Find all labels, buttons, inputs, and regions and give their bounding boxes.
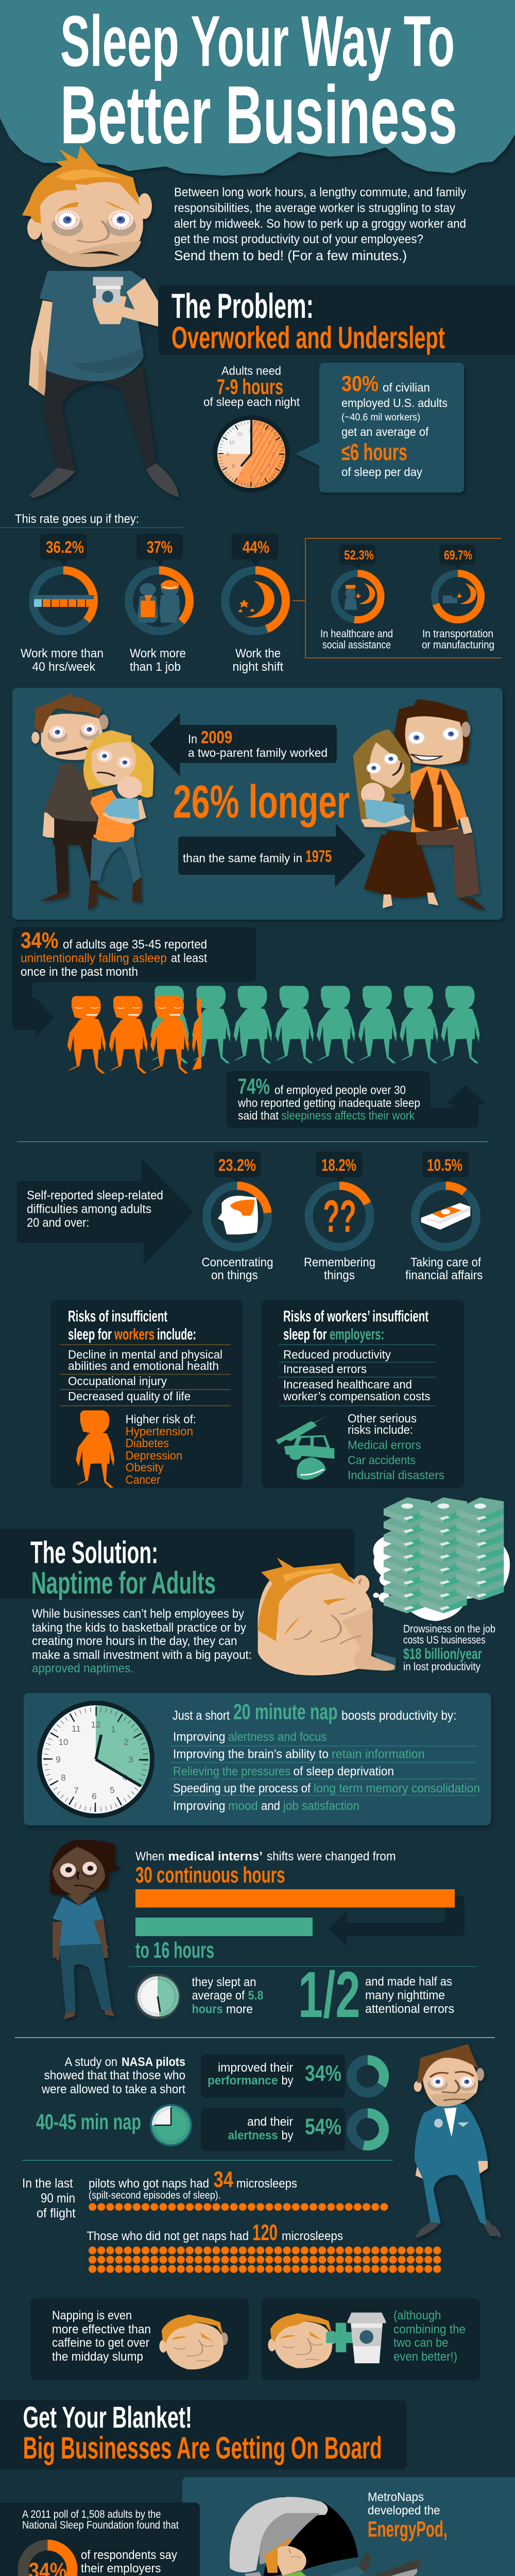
stat: performance 34%: improved their	[218, 2061, 293, 2075]
stat: slept 5.8 hours more: hours	[192, 2002, 222, 2016]
panel: combining nap and coffee: (although	[393, 2309, 441, 2323]
stat: medical interns shifts chart: medical interns’	[168, 1850, 263, 1863]
stat: drowsiness cost: costs US businesses	[403, 1634, 486, 1646]
stat: 10.5% financial affairs: financial affairs	[405, 1268, 483, 1282]
icon: clock showing 7-9 hours: 1	[260, 432, 263, 437]
panel: 20 minute nap	[24, 1693, 491, 1825]
panel: families work longer	[12, 688, 503, 920]
list: other serious risks: Car accidents	[348, 1453, 416, 1467]
stat: 18.2% remembering: 18.2%	[321, 1156, 356, 1175]
icon: head with brain	[218, 1196, 258, 1234]
stat: microsleeps without naps: Those who did not get naps had	[87, 2229, 249, 2243]
stat: 18.2% remembering	[304, 1151, 375, 1282]
callout: 30% of workers: 30%	[341, 371, 379, 396]
stat: 44% work night shift: 44%	[243, 538, 269, 556]
icon: orange person	[76, 1410, 114, 1488]
stat: alertness 54%: alertness	[228, 2129, 278, 2142]
icon: big clock: 9	[56, 1755, 61, 1765]
arrow: than the same family in 1975: 1975	[305, 847, 332, 866]
stat: microsleeps without naps: 120	[252, 2220, 278, 2245]
section heading: the solution: Naptime for Adults	[31, 1566, 216, 1600]
arrow: in 2009: In	[188, 733, 197, 746]
stat: 23.2% concentrating: 23.2%	[218, 1156, 256, 1175]
panel: sleep foundation poll	[0, 2503, 200, 2576]
list: other serious risks: Medical errors	[348, 1438, 421, 1452]
stat: 26% longer: 26% longer	[173, 776, 350, 828]
stat: microsleeps with naps	[22, 2167, 388, 2221]
panel: risks for workers: sleep for	[68, 1325, 112, 1343]
icon: clock showing 7-9 hours: 10	[229, 440, 235, 446]
icon: clock showing 7-9 hours: 7	[240, 472, 243, 478]
icon: 45 minute clock	[150, 2104, 192, 2146]
stat: microsleeps with naps: of flight	[37, 2206, 76, 2221]
icon: syringe, truck and helmet	[276, 1416, 334, 1480]
stat: 18.2% remembering: Remembering	[304, 1256, 375, 1269]
stat: alertness 54%: 54%	[305, 2114, 341, 2139]
list: nap benefits: Speeding up the process of	[173, 1782, 311, 1795]
list: nap benefits: retain information	[332, 1748, 425, 1761]
icon: big clock: 10	[59, 1737, 68, 1747]
stat: microsleeps without naps	[87, 2220, 441, 2274]
list: nap benefits: mood	[228, 1799, 258, 1813]
list: nap benefits: Improving	[173, 1730, 226, 1744]
bar: 16 hours	[135, 1918, 313, 1936]
stat: performance 34%: 34%	[305, 2061, 341, 2086]
callout: 30% of workers: (~40.6 mil workers)	[341, 412, 420, 423]
character: sleeping head	[258, 1557, 396, 1675]
list: health risks: Depression	[126, 1449, 182, 1462]
list: nap benefits: and	[261, 1799, 280, 1813]
stat: performance 34%: performance	[208, 2074, 278, 2088]
character: tired worker with coffee	[22, 145, 179, 498]
list: health risks: Higher risk of:	[126, 1413, 196, 1426]
pictogram: 120 dots	[88, 2246, 441, 2274]
arrow: than the same family in 1975: than the same family in	[183, 852, 302, 865]
solution intro text: approved naptimes.	[32, 1662, 134, 1675]
panel: napping vs caffeine	[30, 2298, 249, 2380]
panel: risks for workers: Decline in mental and physical	[68, 1348, 222, 1361]
panel: 74% affected at work: 74%	[238, 1074, 270, 1099]
arrow: from long shift to short shift	[329, 1895, 465, 1945]
intro text: responsibilities, the average worker is struggling to stay	[174, 201, 455, 215]
panel: risks for employers	[262, 1300, 464, 1488]
list: health risks: Cancer	[126, 1473, 160, 1486]
section heading: get your blanket	[0, 2400, 407, 2469]
stat: 37% work more than one job	[129, 534, 190, 674]
panel: combining nap and coffee: combining the	[393, 2323, 466, 2336]
panel: risks for employers: worker’s compensation costs	[283, 1389, 431, 1403]
icon: big clock: 1	[111, 1724, 116, 1734]
stat: medical interns shifts chart: When	[135, 1850, 164, 1863]
stat: 10.5% financial affairs	[405, 1151, 483, 1282]
stat: adults need 7-9 hours: 7-9 hours	[217, 375, 283, 399]
icon: clock showing 7-9 hours: 11	[237, 432, 243, 437]
list: health risks: Hypertension	[126, 1425, 193, 1438]
stat: half as many errors: attentional errors	[365, 2002, 454, 2016]
stat: half as many errors: and made half as	[365, 1975, 452, 1989]
icon: big clock: 5	[110, 1785, 115, 1795]
list: nap benefits: Relieving the pressures	[173, 1765, 290, 1778]
text: NASA pilot study: NASA pilots	[122, 2055, 185, 2069]
stat: microsleeps with naps: microsleeps	[236, 2177, 297, 2191]
panel: napping vs caffeine: the midday slump	[52, 2350, 143, 2364]
character: tired 2009 family	[31, 693, 154, 910]
list: other serious risks	[348, 1412, 444, 1482]
stat: half as many errors: 1/2	[298, 1958, 360, 2031]
stat: slept 5.8 hours more: average of	[192, 1989, 245, 2003]
text: NASA pilot study: 40-45 min nap	[36, 2110, 141, 2134]
list: health risks: Diabetes	[126, 1436, 169, 1450]
text: NASA pilot study: showed that that those who	[44, 2069, 185, 2082]
icon: big clock: 4	[123, 1773, 128, 1783]
intro text: Between long work hours, a lengthy commute, and family	[174, 185, 466, 199]
stat: microsleeps without naps: microsleeps	[282, 2229, 343, 2243]
panel: 34% unintentionally falling asleep: 34%	[21, 928, 59, 953]
panel: 74% affected at work: said that	[238, 1109, 279, 1122]
panel: risks for employers: sleep for	[283, 1325, 327, 1343]
stat: 52.3% healthcare: In healthcare and	[320, 628, 393, 640]
icon: big clock	[37, 1701, 154, 1818]
panel: risks for workers: Occupational injury	[68, 1375, 167, 1388]
icon: clock showing 7-9 hours: 6	[250, 476, 253, 481]
list: nap benefits	[170, 1730, 480, 1813]
stat: slept 5.8 hours more: they slept an	[192, 1975, 256, 1989]
stat: 52.3% healthcare	[320, 545, 393, 651]
character: medical intern	[50, 1840, 121, 2019]
stat: slept 5.8 hours more	[135, 1974, 264, 2019]
list: nap benefits: long term memory consolidation	[314, 1782, 480, 1795]
pictogram: row of orange sleepy adults	[67, 996, 201, 1074]
panel: 74% affected at work: who reported getting inadequate sleep	[237, 1096, 420, 1110]
panel: 34% unintentionally falling asleep: unintentionally falling asleep	[21, 951, 167, 965]
stat: half as many errors	[298, 1958, 454, 2031]
pictogram: 34 dots	[88, 2203, 388, 2211]
icon: big clock: 11	[72, 1724, 81, 1734]
intro text: get the most productivity out of your employees?	[174, 232, 423, 246]
stat: microsleeps with naps: pilots who got naps had	[89, 2177, 209, 2191]
stat: 37% work more than one job: 37%	[147, 538, 173, 556]
stat: 69.7% transportation: 69.7%	[444, 548, 472, 563]
stat: 10.5% financial affairs: 10.5%	[427, 1156, 462, 1175]
panel: 74% affected at work: of employed people over 30	[274, 1083, 406, 1096]
section heading: the solution	[0, 1529, 354, 1600]
panel: 34% unintentionally falling asleep	[12, 927, 256, 1037]
icon: big clock: 3	[128, 1755, 133, 1765]
section heading: get your blanket: Get Your Blanket!	[23, 2401, 192, 2434]
icon: clock showing 7-9 hours: 2	[268, 440, 271, 446]
tired worker body	[29, 271, 179, 498]
arrow: than the same family in 1975	[178, 823, 366, 887]
arrow: in 2009: 2009	[201, 727, 232, 747]
bar: 30 hours	[135, 1889, 455, 1907]
title	[60, 1, 457, 161]
section heading: the solution: The Solution:	[30, 1535, 158, 1570]
stat: 52.3% healthcare: social assistance	[322, 639, 391, 651]
section heading: the problem: The Problem:	[171, 286, 314, 326]
panel: napping vs caffeine: Napping is even	[52, 2309, 132, 2323]
stat: slept 5.8 hours more: more	[226, 2002, 253, 2016]
text: metronaps developed	[368, 2490, 448, 2542]
panel: risks for employers: Risks of workers’ insufficient	[283, 1307, 428, 1325]
stat: microsleeps with naps: In the last	[22, 2176, 73, 2191]
icon: clock showing 7-9 hours: 4	[268, 464, 271, 469]
stat: 69.7% transportation	[422, 545, 494, 651]
stat: performance 34%	[201, 2055, 384, 2098]
solution intro text: taking the kids to basketball practice or by	[32, 1621, 246, 1635]
callout: 30% of workers: ≤6 hours	[341, 439, 407, 465]
icon: clock showing 7-9 hours: 8	[232, 464, 235, 469]
panel: combining nap and coffee: two can be	[393, 2336, 448, 2350]
panel: risks for employers: employers:	[330, 1325, 384, 1343]
character: rested 1975 family	[353, 699, 486, 910]
stat: microsleeps with naps: (spilt-second episodes of sleep).	[89, 2190, 221, 2201]
icon: moon and stars	[238, 581, 274, 618]
stat: 69.7% transportation: In transportation	[422, 628, 493, 640]
stat: alertness 54%	[201, 2108, 384, 2151]
icon: clock showing 7-9 hours	[213, 415, 290, 493]
panel: risks for workers	[51, 1300, 243, 1488]
panel: combining nap and coffee: even better!)	[393, 2350, 457, 2364]
stat: 36.2% work more than 40 hrs: 36.2%	[46, 538, 84, 556]
arrow panel: self-reported difficulties: 20 and over:	[27, 1216, 90, 1230]
stat: drowsiness cost	[403, 1623, 495, 1673]
panel: risks for workers: Risks of insufficient	[68, 1307, 167, 1325]
stat: 34% allowed to nap: of respondents say	[81, 2548, 177, 2562]
stat: 23.2% concentrating: on things	[211, 1268, 258, 1282]
text: metronaps developed: developed the	[368, 2504, 440, 2518]
panel: 74% affected at work	[227, 1071, 486, 1128]
icon: clock showing 7-9 hours: 5	[260, 472, 263, 478]
list: health risks	[126, 1413, 196, 1486]
icon: big clock: 7	[74, 1786, 79, 1795]
stat: 23.2% concentrating	[202, 1151, 273, 1282]
icon: clock showing 7-9 hours: 3	[271, 452, 274, 457]
icon: big clock: 12	[91, 1720, 100, 1730]
icon: big clock: 2	[124, 1737, 129, 1747]
panel: risks for workers: workers	[114, 1325, 154, 1343]
stat: 44% work night shift: Work the	[235, 647, 281, 660]
stat: medical interns shifts chart: 30 continuous hours	[135, 1862, 285, 1888]
arrow panel: self-reported difficulties	[17, 1159, 194, 1265]
arrow: in 2009: a two-parent family worked	[188, 746, 328, 759]
list: nap benefits: alertness and focus	[228, 1730, 327, 1744]
panel: risks for employers: Increased healthcare and	[283, 1378, 412, 1391]
arrow: in 2009	[149, 713, 337, 776]
stat: alertness 54%: and their	[247, 2115, 293, 2129]
panel: sleep foundation poll: A 2011 poll of 1,508 adults by the	[22, 2509, 161, 2520]
stat: adults need 7-9 hours	[203, 364, 300, 409]
stat: adults need 7-9 hours: of sleep each night	[203, 395, 300, 409]
heading: this rate goes up: This rate goes up if they:	[15, 512, 139, 526]
stat: 44% work night shift	[225, 534, 286, 674]
stat: microsleeps with naps: 90 min	[41, 2191, 75, 2206]
icon: two workers	[138, 580, 180, 623]
panel: 74% affected at work: sleepiness affects their work	[281, 1109, 415, 1122]
stat: 69.7% transportation: or manufacturing	[422, 639, 494, 651]
panel: 34% unintentionally falling asleep: at least	[171, 951, 207, 965]
callout: 30% of workers: of civilian	[383, 381, 430, 394]
panel: napping vs caffeine: more effective than	[52, 2323, 151, 2336]
intro text	[174, 185, 466, 263]
intro text: Send them to bed! (For a few minutes.)	[174, 248, 407, 263]
icon: stack of money	[421, 1203, 470, 1230]
solution intro text	[32, 1607, 252, 1675]
frame: night shift sectors	[293, 538, 502, 658]
icon: sleepy head	[159, 2314, 228, 2369]
panel: 34% unintentionally falling asleep: of adults age 35-45 reported	[63, 938, 207, 952]
callout: 30% of workers: get an average of	[341, 425, 429, 438]
icon: big clock: 6	[92, 1791, 97, 1801]
stat: medical interns shifts chart: to 16 hours	[135, 1938, 214, 1963]
stat: adults need 7-9 hours: Adults need	[221, 364, 281, 377]
panel: combining nap and coffee	[262, 2298, 480, 2380]
solution intro text: make a small investment with a big payout:	[32, 1648, 252, 1662]
header cloud	[0, 0, 515, 176]
icon: week blocks	[34, 595, 94, 607]
list: other serious risks: Industrial disasters	[348, 1468, 444, 1482]
stat: 36.2% work more than 40 hrs: Work more than	[21, 647, 104, 660]
list: nap benefits: Improving	[173, 1799, 226, 1813]
callout: 30% of workers: of sleep per day	[341, 465, 422, 479]
stat: 18.2% remembering: things	[324, 1268, 355, 1282]
stat: drowsiness cost: $18 billion/year	[403, 1646, 482, 1663]
section heading: the problem	[158, 285, 515, 355]
icon: question marks: ??	[323, 1191, 356, 1242]
text: NASA pilot study	[36, 2055, 185, 2134]
character: tired pilot	[414, 2044, 501, 2238]
panel: EnergyPod	[182, 2477, 515, 2576]
panel: risks for workers: abilities and emotional health	[68, 1359, 219, 1372]
solution intro text: creating more hours in the day, they can	[32, 1634, 237, 1648]
stat: slept 5.8 hours more: 5.8	[248, 1989, 264, 2003]
stat: 36.2% work more than 40 hrs: 40 hrs/week	[32, 660, 96, 674]
stat: medical interns shifts chart	[135, 1850, 465, 1963]
stat: 36.2% work more than 40 hrs	[21, 534, 104, 674]
heading: just a short 20 minute nap: Just a short	[173, 1708, 230, 1723]
icon: sleepy head plus coffee	[268, 2313, 386, 2368]
stat: performance 34%: by	[281, 2074, 294, 2088]
stat: 23.2% concentrating: Concentrating	[202, 1256, 273, 1269]
stat: alertness 54%: by	[281, 2129, 294, 2142]
panel: risks for employers: Reduced productivity	[283, 1348, 391, 1361]
list: other serious risks: Other serious	[348, 1412, 417, 1425]
stat: medical interns shifts chart: shifts were changed from	[267, 1850, 396, 1863]
heading: just a short 20 minute nap	[173, 1700, 456, 1724]
icon: clock showing 7-9 hours: 12	[248, 428, 254, 434]
stat: 52.3% healthcare: 52.3%	[344, 548, 374, 563]
panel: sleep foundation poll: National Sleep Foundation found that	[22, 2519, 179, 2531]
stat: drowsiness cost: Drowsiness on the job	[403, 1623, 495, 1635]
heading: just a short 20 minute nap: boosts productivity by:	[341, 1708, 456, 1723]
arrow panel: self-reported difficulties: Self-reported sleep-related	[27, 1189, 163, 1202]
list: other serious risks: risks include:	[348, 1423, 413, 1436]
text: NASA pilot study: A study on	[65, 2055, 117, 2069]
stat: half as many errors: many nighttime	[365, 1989, 445, 2003]
heading: just a short 20 minute nap: 20 minute nap	[233, 1700, 338, 1724]
pictogram: row of green employees	[150, 986, 479, 1063]
intro text: alert by midweek. So how to perk up a groggy worker and	[174, 217, 466, 231]
panel: risks for employers: Increased errors	[283, 1362, 367, 1376]
stat: microsleeps with naps: 34	[213, 2167, 233, 2192]
list: health risks: Obesity	[126, 1461, 164, 1474]
stat: 37% work more than one job: than 1 job	[130, 660, 181, 674]
panel: risks for workers: include:	[157, 1325, 196, 1343]
panel: napping vs caffeine: caffeine to get over	[52, 2336, 149, 2350]
stat: 37% work more than one job: Work more	[130, 647, 186, 660]
stat: drowsiness cost: in lost productivity	[403, 1661, 480, 1673]
list: nap benefits: Improving the brain’s ability to	[173, 1748, 329, 1761]
panel: 34% unintentionally falling asleep: once in the past month	[21, 965, 138, 979]
stat: 34% allowed to nap: their employers	[81, 2562, 161, 2575]
text: metronaps developed: EnergyPod,	[368, 2517, 448, 2542]
arrow panel: self-reported difficulties: difficulties among adults	[27, 1202, 151, 1216]
callout: 30% of workers: employed U.S. adults	[341, 396, 448, 410]
panel: risks for workers: Decreased quality of life	[68, 1389, 191, 1403]
illustration: thought cloud of money	[373, 1497, 510, 1621]
solution intro text: While businesses can’t help employees by	[32, 1607, 244, 1621]
stat: 34% allowed to nap	[23, 2545, 177, 2576]
illustration: sleep pod	[224, 2497, 421, 2576]
text: NASA pilot study: were allowed to take a short	[41, 2082, 185, 2096]
text: metronaps developed: MetroNaps	[368, 2490, 424, 2504]
stat: 44% work night shift: night shift	[233, 660, 283, 674]
list: nap benefits: job satisfaction	[283, 1799, 359, 1813]
icon: big clock: 8	[61, 1773, 66, 1783]
icon: clock showing 7-9 hours: 9	[226, 452, 229, 457]
list: nap benefits: of sleep deprivation	[294, 1765, 394, 1778]
callout: 30% of workers	[296, 363, 464, 493]
stat: 10.5% financial affairs: Taking care of	[410, 1256, 481, 1269]
tired worker head	[22, 145, 152, 267]
